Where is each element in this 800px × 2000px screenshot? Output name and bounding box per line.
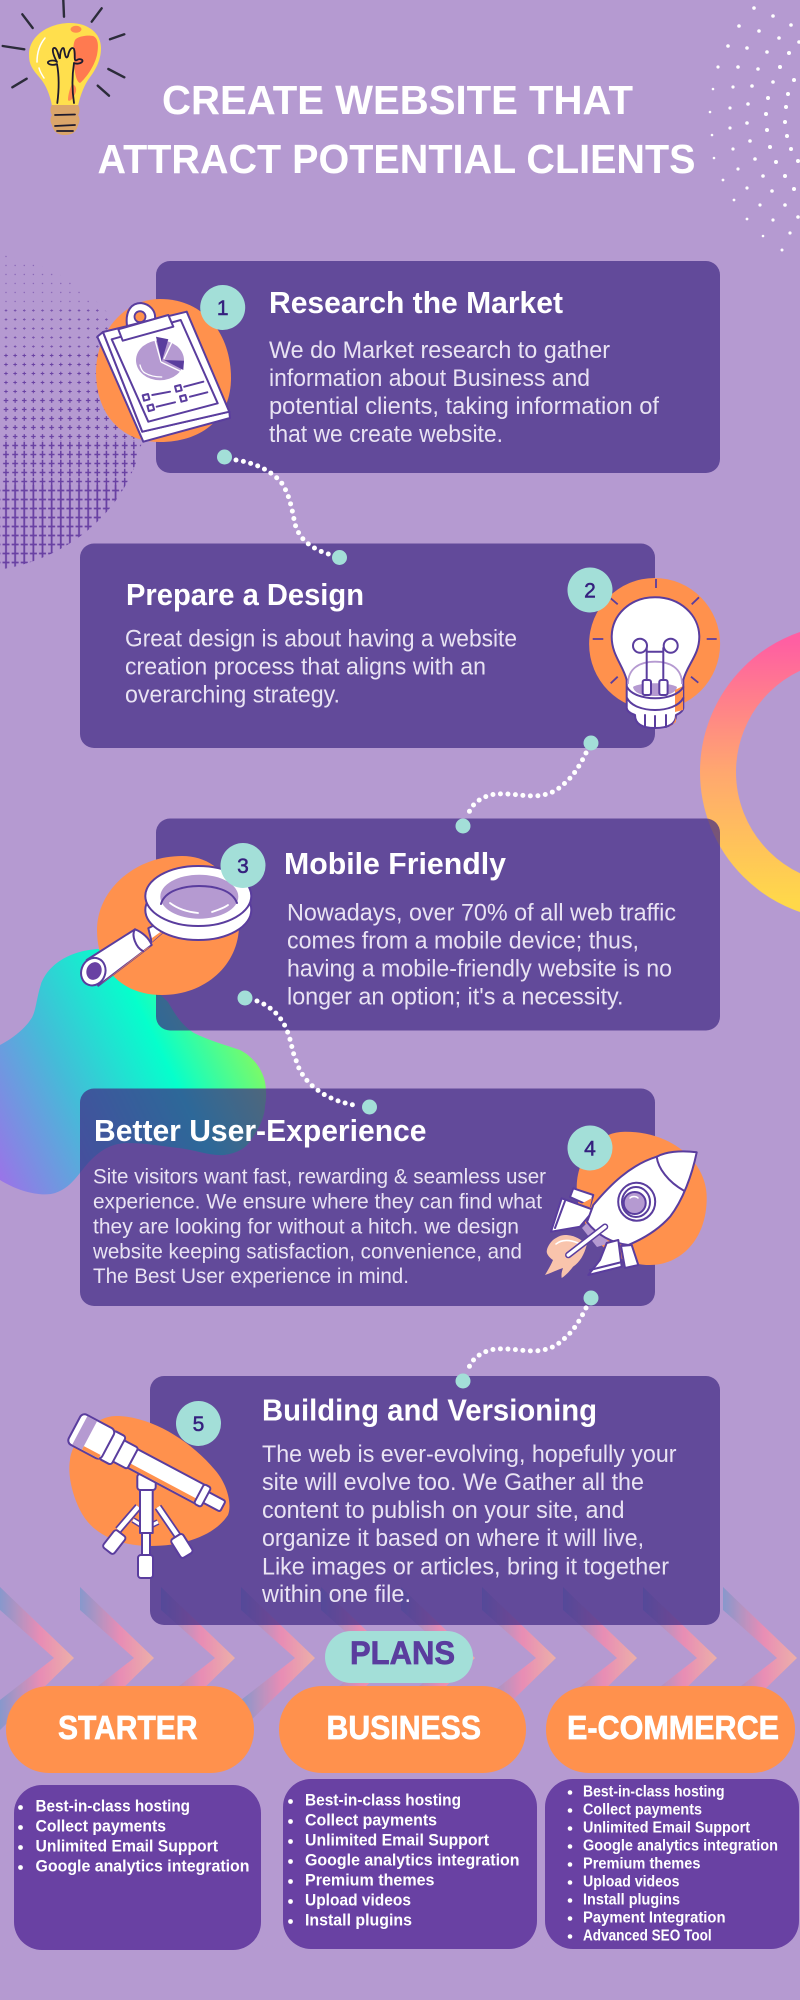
plan header: starter: STARTER	[58, 1709, 198, 1746]
badge: number 4	[568, 1126, 612, 1170]
panel: prepare a design	[80, 544, 720, 748]
heading: better user-experience: Better User-Experience	[94, 1113, 426, 1148]
title	[98, 77, 696, 182]
text: building description: site will evolve too. We Gather all the	[262, 1469, 644, 1496]
plan header: e-commerce	[546, 1686, 795, 1773]
badge: number 1: 1	[217, 297, 229, 320]
plan features: starter: Collect payments	[36, 1818, 166, 1836]
text: mobile description	[287, 900, 676, 1011]
text: user experience description: The Best User experience in mind.	[93, 1264, 409, 1288]
connector: step 3 to step 4	[238, 990, 377, 1114]
text: building description: Like images or articles, bring it together	[262, 1553, 669, 1580]
connector: step 4 to step 5	[456, 1290, 598, 1388]
text: design description: Great design is about having a website	[125, 626, 517, 653]
plan features: business: Collect payments	[305, 1812, 437, 1830]
text: research description	[269, 337, 659, 448]
decorative chevron row	[0, 1587, 797, 1730]
text: design description	[125, 626, 517, 709]
badge: number 5: 5	[193, 1413, 204, 1436]
connector: step 2 to step 3	[456, 736, 598, 834]
text: research description: We do Market research to gather	[269, 337, 610, 364]
text: building description: organize it based on where it will live,	[262, 1525, 644, 1552]
plan features: e-commerce: Advanced SEO Tool	[583, 1928, 712, 1945]
plan features: starter: Best-in-class hosting	[36, 1798, 190, 1816]
text: user experience description: Site visitors want fast, rewarding & seamless user	[93, 1164, 546, 1188]
plan header: business: BUSINESS	[326, 1709, 481, 1746]
decorative halftone shape	[0, 256, 142, 569]
plan features: e-commerce: Install plugins	[583, 1892, 680, 1909]
connector: step 1 to step 2	[217, 450, 347, 565]
text: building description: The web is ever-evolving, hopefully your	[262, 1441, 677, 1468]
panel: mobile friendly	[77, 818, 720, 1030]
icon: rocket	[545, 1132, 707, 1278]
heading: building and versioning: Building and Versioning	[262, 1392, 597, 1427]
badge: number 3: 3	[237, 855, 249, 878]
text: user experience description: website keeping satisfaction, convenience, and	[92, 1239, 522, 1263]
plan features: e-commerce: Google analytics integration	[583, 1838, 778, 1855]
text: research description: potential clients, taking information of	[269, 393, 659, 420]
heading: mobile friendly: Mobile Friendly	[284, 846, 507, 881]
text: user experience description: they are looking for without a hitch. we design	[93, 1214, 519, 1238]
badge: number 2: 2	[584, 580, 596, 602]
plan features: e-commerce: Unlimited Email Support	[583, 1820, 750, 1837]
badge: number 5	[176, 1401, 221, 1446]
panel: research the market	[96, 261, 720, 473]
text: design description: overarching strategy.	[125, 682, 340, 709]
badge: number 4: 4	[584, 1138, 596, 1160]
plan features: e-commerce: Best-in-class hosting	[583, 1784, 724, 1801]
plan features: e-commerce	[545, 1779, 799, 1949]
title: ATTRACT POTENTIAL CLIENTS	[98, 136, 696, 182]
decorative white dots	[709, 6, 800, 252]
text: user experience description	[92, 1164, 546, 1288]
text: mobile description: longer an option; it's a necessity.	[287, 984, 624, 1011]
badge: number 2	[568, 568, 612, 612]
plan features: starter: Unlimited Email Support	[36, 1838, 218, 1856]
heading: plans	[325, 1631, 473, 1683]
text: building description: within one file.	[261, 1581, 411, 1608]
badge: number 3	[220, 843, 266, 888]
badge: number 1	[200, 285, 245, 330]
panel: better user-experience	[80, 1088, 707, 1306]
plan features: e-commerce: Premium themes	[583, 1856, 700, 1873]
text: mobile description: comes from a mobile device; thus,	[287, 928, 639, 955]
plan features: business: Upload videos	[305, 1892, 411, 1910]
decorative gradient ring	[718, 642, 800, 902]
text: user experience description: experience. We ensure where they can find what	[93, 1190, 542, 1214]
icon: light bulb illustration	[3, 0, 124, 135]
decorative gradient blob	[0, 949, 266, 1194]
plan header: starter	[6, 1686, 254, 1773]
text: research description: that we create website.	[269, 421, 503, 448]
heading: research the market: Research the Market	[269, 285, 563, 320]
plan features: starter	[14, 1785, 261, 1950]
panel: building and versioning	[67, 1376, 720, 1625]
icon: magnifying glass	[77, 856, 251, 995]
text: research description: information about Business and	[269, 365, 590, 392]
text: building description	[261, 1441, 677, 1608]
heading: prepare a design: Prepare a Design	[126, 577, 364, 612]
plan features: e-commerce: Upload videos	[583, 1874, 680, 1891]
icon: telescope	[67, 1412, 231, 1578]
plan features: business: Premium themes	[305, 1872, 434, 1890]
plan features: business: Google analytics integration	[305, 1852, 520, 1870]
text: mobile description: Nowadays, over 70% of all web traffic	[287, 900, 676, 926]
plan features: business: Best-in-class hosting	[305, 1792, 461, 1810]
text: building description: content to publish on your site, and	[262, 1497, 624, 1524]
heading: plans: PLANS	[350, 1635, 455, 1671]
icon: light bulb in orange circle	[589, 578, 720, 728]
text: mobile description: having a mobile-friendly website is no	[287, 956, 672, 983]
plan features: business: Unlimited Email Support	[305, 1832, 489, 1850]
plan features: business	[283, 1779, 537, 1949]
plan features: e-commerce: Collect payments	[583, 1802, 702, 1819]
plan header: e-commerce: E-COMMERCE	[567, 1709, 779, 1746]
text: design description: creation process that aligns with an	[125, 654, 486, 681]
plan features: e-commerce: Payment Integration	[583, 1910, 726, 1927]
title: CREATE WEBSITE THAT	[162, 77, 633, 123]
plan header: business	[279, 1686, 526, 1773]
plan features: starter: Google analytics integration	[36, 1858, 250, 1876]
plan features: business: Install plugins	[305, 1912, 412, 1930]
icon: clipboard with pie chart	[96, 299, 231, 442]
